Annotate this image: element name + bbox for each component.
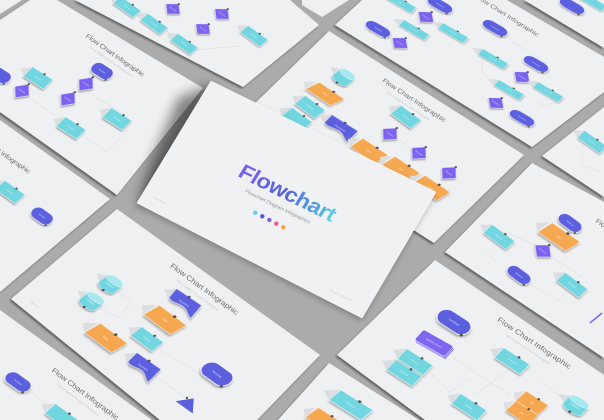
- slide: right middle: [542, 107, 604, 197]
- data: Data: [365, 149, 373, 154]
- process: [430, 18, 469, 43]
- slide: bottom right: [337, 260, 604, 420]
- footer left: Flowchart: [153, 196, 166, 205]
- process: [391, 15, 430, 40]
- slide: centre with orange shapes: [239, 31, 524, 243]
- process 2: [134, 8, 169, 35]
- multi document stack: Multidocument: [425, 337, 444, 349]
- process: Process: [306, 104, 314, 110]
- terminal: [480, 18, 510, 38]
- decision: Decision: [17, 89, 26, 95]
- terminal: [2, 369, 34, 395]
- process: Process: [345, 401, 358, 410]
- slide: left middle: [0, 120, 110, 292]
- database: [323, 62, 358, 89]
- decision: Decision: [63, 97, 72, 103]
- process 3: Process: [180, 41, 188, 47]
- process: Process: [410, 359, 420, 366]
- decision 1: Decision: [169, 7, 176, 12]
- title: Flow Chart Infographic: [496, 315, 573, 371]
- decision: [483, 92, 510, 113]
- data: Data: [555, 234, 563, 240]
- title: Flow Chart Infographic: [169, 262, 240, 317]
- decision 1: [160, 0, 187, 19]
- process: Process: [464, 404, 474, 411]
- terminal: [507, 108, 537, 128]
- process: [444, 388, 488, 420]
- data: [375, 150, 421, 182]
- process: [379, 354, 423, 386]
- process: Process: [67, 125, 75, 131]
- footer right: Flowchart Diagram: [328, 288, 353, 303]
- data: [530, 216, 581, 252]
- data: [299, 402, 344, 420]
- terminal: Terminal: [373, 27, 383, 33]
- terminal: [504, 263, 534, 287]
- terminal: [557, 0, 587, 16]
- decision: Decision: [421, 14, 430, 20]
- data: [77, 316, 129, 354]
- data: [405, 169, 451, 201]
- terminal: Terminal: [490, 26, 500, 32]
- process: [487, 342, 531, 374]
- database: [69, 285, 107, 313]
- database: Database: [85, 298, 96, 306]
- decision: Decision: [414, 150, 423, 157]
- terminal: Terminal: [211, 370, 223, 379]
- database: Database: [569, 402, 581, 411]
- terminal: Terminal: [13, 379, 23, 386]
- data: Data: [102, 335, 110, 341]
- process: [38, 398, 80, 420]
- decision: [509, 66, 536, 87]
- main subtitle: Flowchart Diagram Infographics: [244, 189, 312, 226]
- process: [470, 44, 509, 69]
- process: [17, 62, 54, 89]
- slide: upper left: [0, 0, 203, 195]
- process: [477, 219, 516, 250]
- slide: top centre with diamonds: [75, 0, 319, 87]
- process: Process: [34, 75, 42, 81]
- process 1: [107, 0, 142, 18]
- terminal: [521, 54, 551, 74]
- terminal: [555, 211, 585, 235]
- slide: bottom left: [0, 310, 152, 420]
- data: Data: [397, 167, 405, 172]
- terminal: [425, 0, 455, 15]
- process: [390, 343, 434, 375]
- process: Process: [409, 27, 418, 33]
- slide: lower centre: [11, 209, 320, 420]
- data: Data: [161, 317, 169, 323]
- main slide shadow: [137, 84, 212, 205]
- terminal: Terminal: [517, 116, 527, 122]
- subtitle: Set a tagline for your infographic: [505, 334, 550, 365]
- decision: [72, 72, 101, 95]
- database: [551, 388, 591, 419]
- process: [568, 0, 604, 11]
- process: Process: [448, 30, 457, 36]
- title: Flow Chart Infographic: [381, 78, 447, 124]
- process 4: [234, 20, 269, 47]
- decision: Decision: [81, 82, 90, 88]
- decision: Decision: [491, 100, 500, 106]
- data: [299, 76, 346, 106]
- decision: Decision: [385, 131, 394, 138]
- data: Data: [427, 186, 435, 191]
- process: Process: [504, 87, 513, 93]
- process: [96, 103, 133, 130]
- database: Database: [104, 281, 115, 289]
- database: [88, 268, 126, 296]
- decision: Decision: [444, 170, 453, 177]
- decision: Decision: [538, 248, 547, 255]
- decision: [387, 32, 414, 53]
- process: [525, 77, 564, 102]
- slide: top left corner: [0, 0, 22, 14]
- data: [510, 386, 549, 416]
- terminal: Terminal: [514, 272, 524, 279]
- title: Flow Chart Infographic: [84, 33, 146, 79]
- slide: top right small: [302, 0, 349, 17]
- terminal: [433, 306, 475, 338]
- decision: [413, 6, 440, 27]
- terminal: Terminal: [97, 68, 106, 75]
- decision 3: Decision: [218, 12, 225, 17]
- process: [124, 321, 165, 351]
- triangle: [175, 397, 194, 414]
- process: Process: [507, 358, 517, 365]
- data: [343, 132, 389, 164]
- process 1: Process: [123, 4, 131, 10]
- accent bar: [590, 313, 602, 323]
- terminal left: [0, 64, 14, 86]
- decision: [435, 161, 464, 184]
- process: Process: [113, 116, 121, 122]
- process: Process: [588, 139, 596, 145]
- subtitle: Set a tagline for your infographic: [88, 45, 133, 78]
- decision 2: [190, 18, 217, 39]
- process 4: Process: [250, 33, 258, 39]
- main slide: [137, 81, 436, 318]
- process: [289, 90, 326, 119]
- process: [550, 267, 589, 298]
- process 2: Process: [150, 21, 158, 27]
- process: [385, 100, 422, 129]
- decision 3: [209, 3, 236, 24]
- decision 2: Decision: [199, 27, 206, 32]
- subtitle: Set a tagline for your infographic: [57, 383, 101, 417]
- decision: Decision: [395, 40, 404, 46]
- data: Data: [519, 411, 525, 416]
- slide: upper right with terminals: [335, 0, 604, 147]
- process: Process: [402, 114, 410, 120]
- document: Document: [178, 298, 190, 308]
- process: [486, 75, 525, 100]
- terminal: Terminal: [435, 3, 445, 9]
- document: Document: [334, 124, 346, 133]
- data: [136, 298, 188, 336]
- terminal: Terminal: [531, 62, 541, 68]
- decision: [376, 122, 405, 145]
- terminal: Terminal: [447, 317, 461, 327]
- decision: Decision: [517, 74, 526, 80]
- terminal: [88, 60, 116, 82]
- process: Process: [494, 234, 504, 241]
- document: [158, 283, 202, 318]
- data: Data: [529, 401, 535, 406]
- process 3: [164, 28, 199, 55]
- decision: [529, 238, 558, 263]
- subtitle: Set a tagline for your infographic: [176, 279, 220, 312]
- decision: [8, 79, 37, 102]
- colour dots: [253, 210, 285, 230]
- document: Document: [137, 362, 149, 372]
- process clipped: [276, 102, 313, 131]
- terminal: Terminal: [565, 220, 575, 227]
- multi document stack: [413, 330, 456, 360]
- terminal: [197, 359, 237, 389]
- process: Process: [488, 56, 497, 62]
- terminal: [28, 205, 56, 227]
- process: Process: [567, 282, 577, 289]
- slide: bottom middle small: [278, 363, 419, 420]
- document: [314, 109, 359, 142]
- process: [378, 0, 417, 13]
- main title: Flowchart: [234, 160, 342, 226]
- process: Process: [396, 0, 405, 6]
- document: [117, 347, 162, 382]
- data: Data: [321, 92, 329, 97]
- process: Process: [6, 189, 14, 195]
- terminal: Terminal: [37, 213, 46, 220]
- slide: right lower: [445, 163, 604, 358]
- data: [500, 396, 539, 420]
- slide: top right corner: [524, 0, 604, 48]
- process: [50, 112, 87, 139]
- process: Process: [543, 89, 552, 95]
- decision: [405, 141, 434, 164]
- footer note: Flowchart: [28, 299, 41, 310]
- terminal: [363, 19, 393, 39]
- process: [0, 175, 26, 204]
- process: Process: [142, 337, 151, 343]
- decision: [54, 87, 83, 110]
- process: [320, 383, 374, 420]
- process: Process: [399, 370, 409, 377]
- subtitle: Set a tagline for your infographic: [386, 91, 431, 122]
